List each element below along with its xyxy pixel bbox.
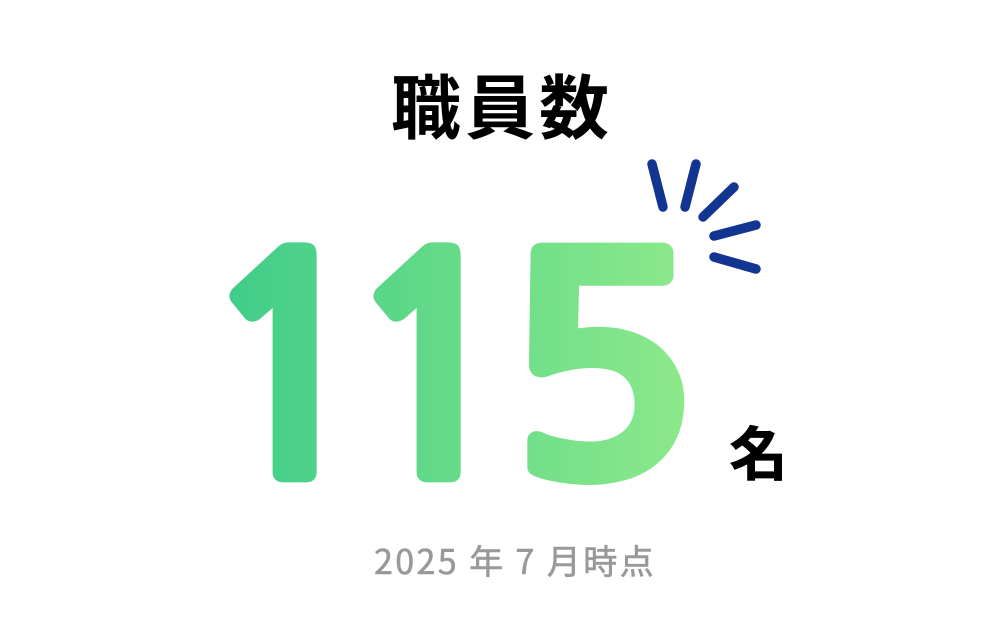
staff count number: 1	[341, 224, 523, 520]
staff count number: 5	[502, 223, 699, 521]
staff count number: 1	[197, 224, 379, 520]
icon: emphasis sparkle lines	[652, 164, 756, 269]
title: 職員数	[391, 53, 613, 154]
staff count number	[197, 223, 699, 521]
date note: 2025 年 7 月時点	[374, 535, 656, 584]
unit: 名	[730, 408, 788, 492]
